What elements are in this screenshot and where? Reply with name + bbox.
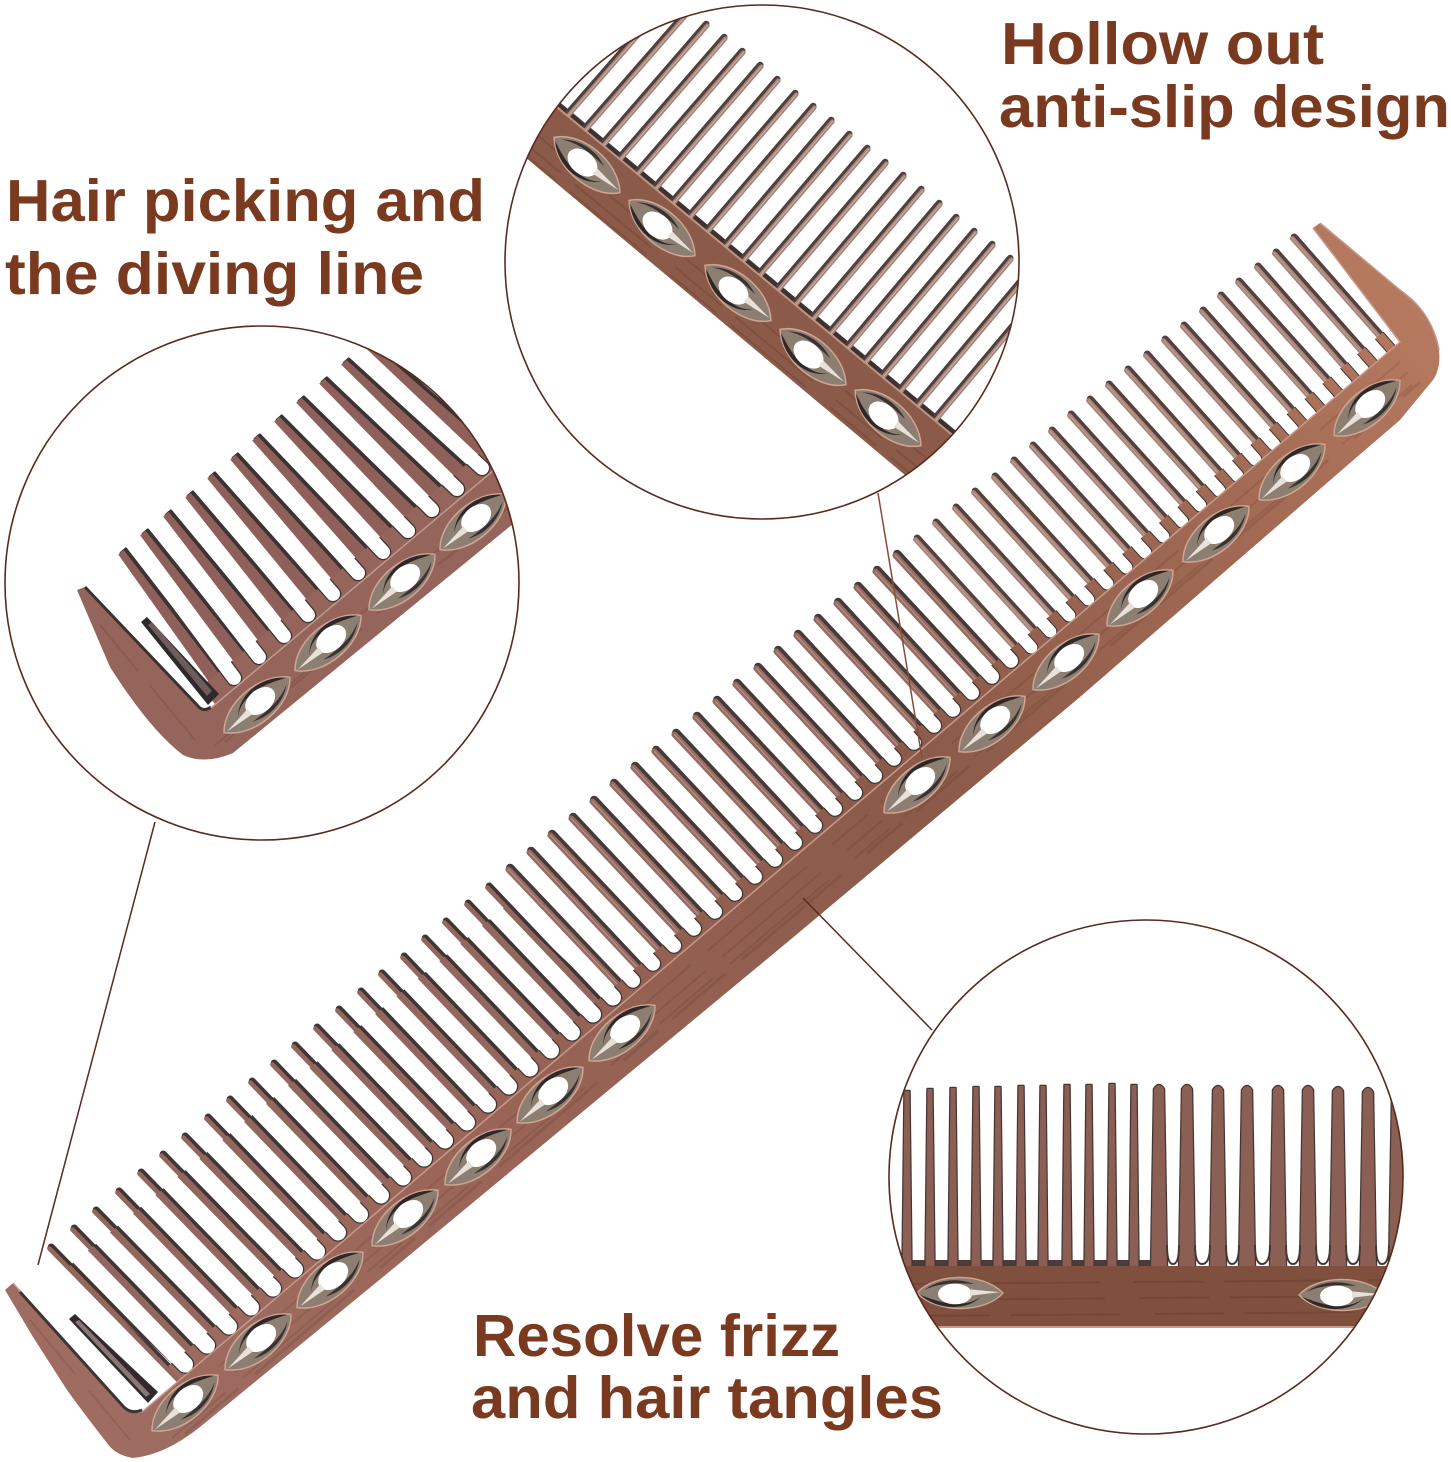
short dark tooth bbox=[69, 1314, 158, 1403]
connector: bottom circle to comb bbox=[803, 898, 932, 1030]
connector: left circle to comb tip bbox=[38, 822, 155, 1265]
panel: top magnified circle bbox=[500, 0, 1047, 519]
bottom circle outline bbox=[889, 920, 1403, 1434]
tooth root band with rounded gaps bbox=[168, 332, 1396, 1379]
heading: hair picking: the diving line bbox=[5, 241, 424, 307]
connector: top circle to comb bbox=[878, 493, 922, 758]
spine edge highlights bbox=[13, 223, 1439, 1412]
left circle outline bbox=[5, 326, 519, 840]
main comb teeth bbox=[49, 237, 1400, 1386]
bottom circle comb detail bbox=[889, 1084, 1405, 1328]
panel: left magnified circle bbox=[5, 326, 530, 840]
left circle comb detail bbox=[77, 340, 530, 760]
heading: resolve frizz: Resolve frizz bbox=[473, 1303, 840, 1369]
heading: hollow out bbox=[999, 11, 1450, 140]
heading: resolve frizz bbox=[471, 1303, 943, 1431]
main comb slots bbox=[141, 367, 1411, 1444]
main comb hook dark line bbox=[20, 1292, 142, 1412]
heading: hollow out: anti-slip design bbox=[999, 74, 1450, 140]
top circle outline bbox=[505, 5, 1019, 519]
heading: hollow out: Hollow out bbox=[1001, 11, 1324, 77]
panel: bottom magnified circle bbox=[889, 920, 1405, 1434]
heading: hair picking: Hair picking and bbox=[6, 168, 485, 234]
heading: resolve frizz: and hair tangles bbox=[471, 1365, 943, 1431]
heading: hair picking bbox=[5, 168, 485, 307]
top circle comb detail bbox=[528, 16, 1018, 475]
spine brushed texture bbox=[30, 362, 1420, 1440]
